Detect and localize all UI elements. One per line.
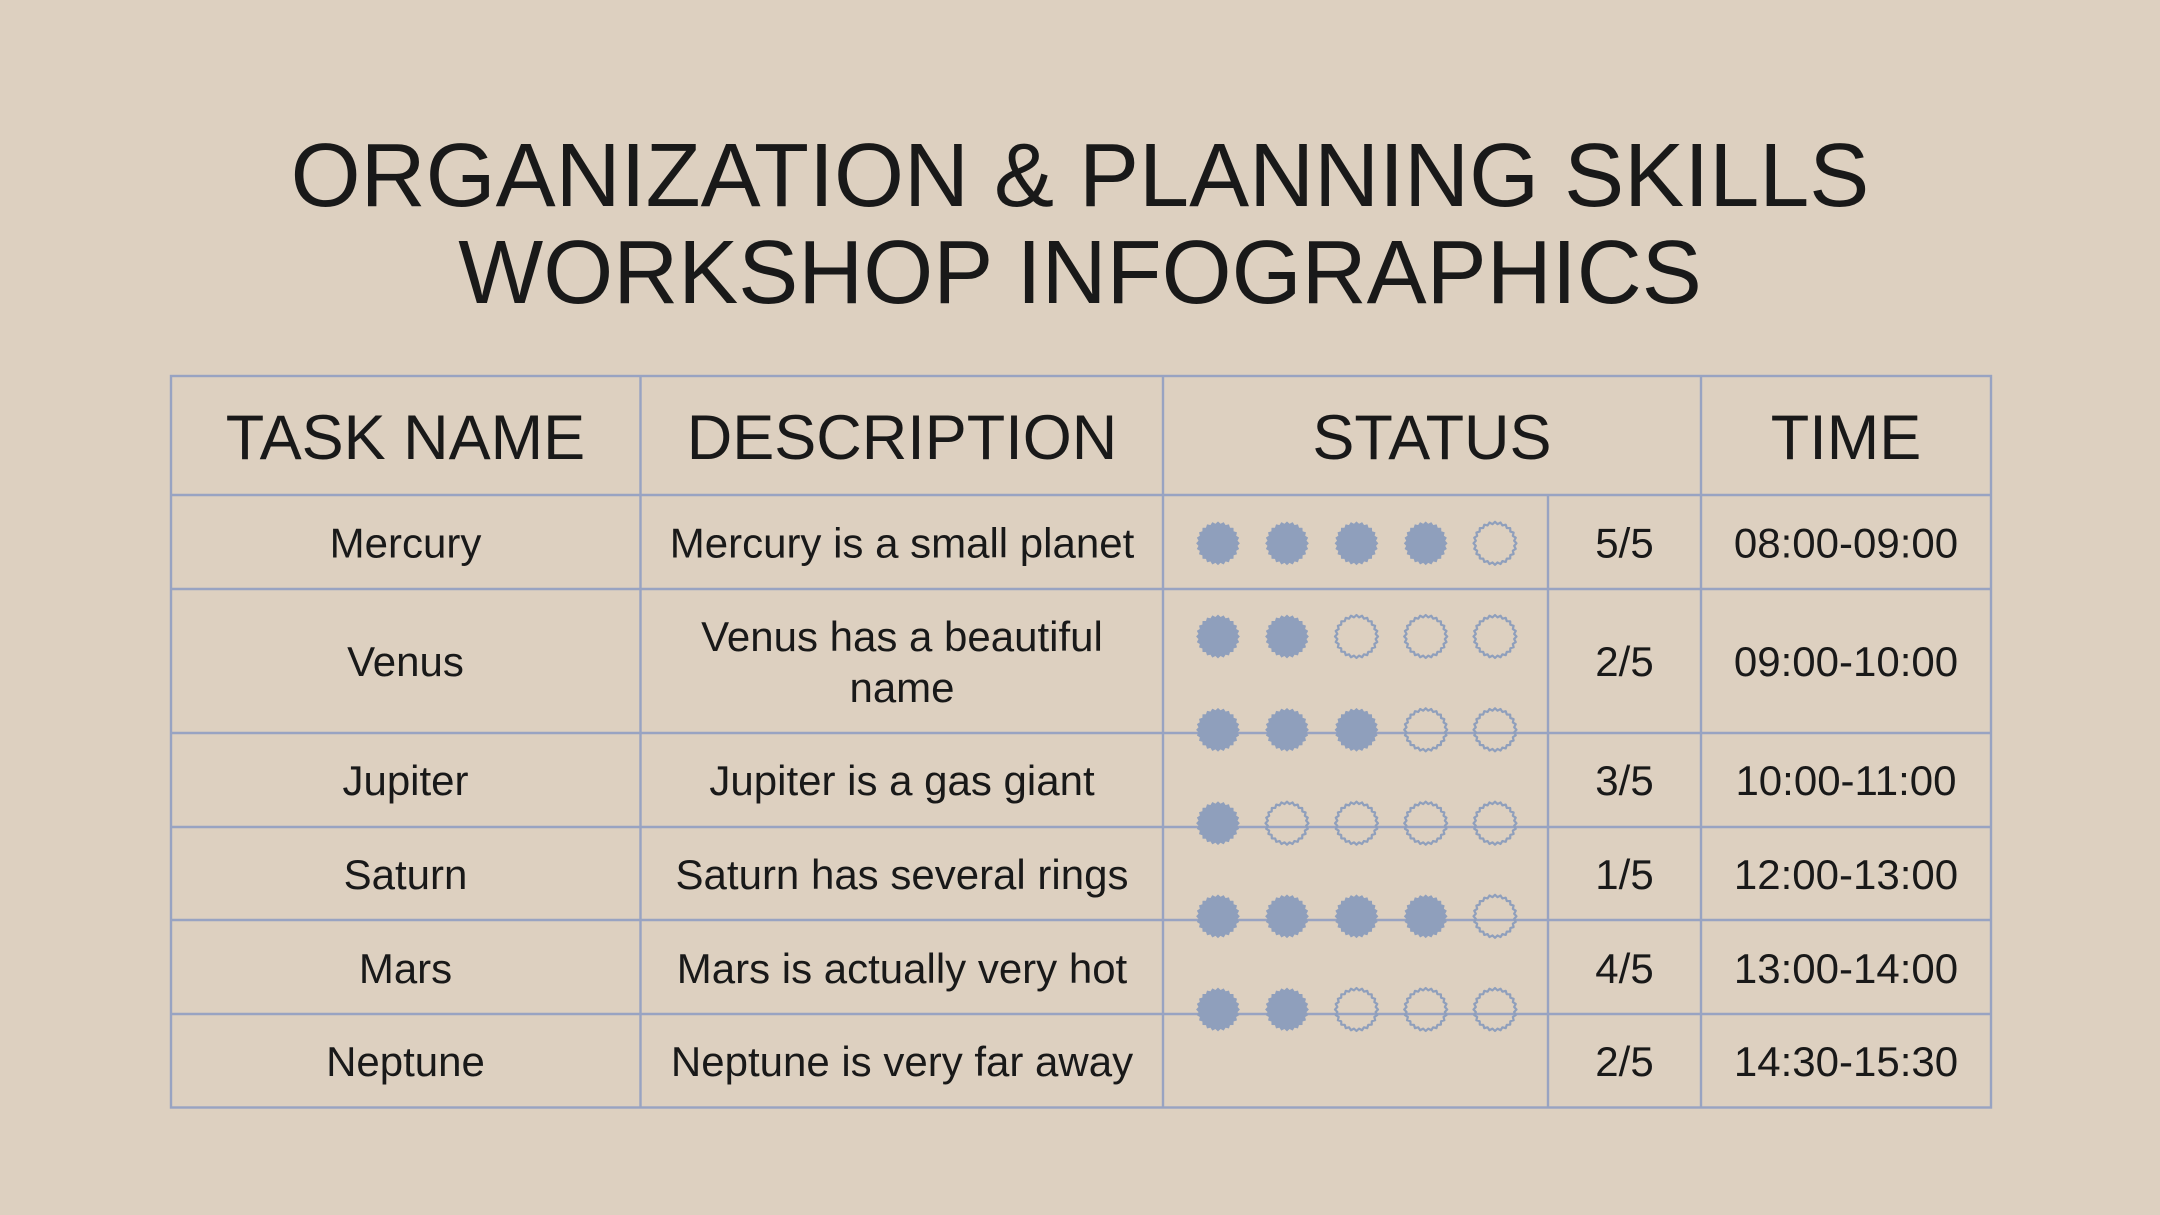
row: Mars: 4/5 [1595,945,1654,992]
row: Mars: 13:00-14:00 [1734,945,1958,992]
row: Mars [359,945,1958,992]
row: Saturn: Saturn has several rings [676,851,1128,898]
header: status: STATUS [1312,403,1552,473]
row: Mercury [330,520,1958,566]
row: Jupiter: 10:00-11:00 [1735,757,1957,804]
row: Jupiter [342,757,1957,804]
row: Neptune: 14:30-15:30 [1734,1038,1958,1085]
status rating dots: row 1 [1196,522,1516,565]
row: Mars: Mars is actually very hot [677,945,1128,992]
row: Jupiter: 3/5 [1595,757,1654,804]
header: description: DESCRIPTION [687,403,1117,473]
row: Mercury: 08:00-09:00 [1734,520,1958,566]
table grid [171,376,1991,1108]
table header row [226,403,1921,473]
row: Venus: name [849,664,955,711]
row: Venus: 09:00-10:00 [1734,638,1958,685]
row: Mars: Mars [359,945,452,992]
status rating dots: row 2 [1196,615,1516,658]
row: Venus [347,613,1958,711]
row: Neptune: 2/5 [1595,1038,1654,1085]
status rating dots: row 5 [1196,895,1516,938]
status rating dots: row 3 [1196,708,1516,751]
header: time: TIME [1771,403,1921,473]
row: Mercury: 5/5 [1595,520,1654,566]
row: Neptune: Neptune [326,1038,485,1085]
row: Saturn: 12:00-13:00 [1734,851,1958,898]
row: Mercury: Mercury is a small planet [670,520,1135,566]
title [291,126,1869,323]
row: Saturn: 1/5 [1595,851,1654,898]
row: Saturn: Saturn [344,851,467,898]
title: ORGANIZATION & PLANNING SKILLS [291,126,1869,226]
row: Mercury: Mercury [330,520,481,566]
title: WORKSHOP INFOGRAPHICS [458,223,1702,323]
header: task name: TASK NAME [226,403,585,473]
row: Neptune: Neptune is very far away [671,1038,1133,1085]
row: Venus: Venus has a beautiful [701,613,1103,660]
row: Venus: 2/5 [1595,638,1654,685]
row: Jupiter: Jupiter is a gas giant [709,757,1095,804]
status rating dots: row 6 [1196,988,1516,1031]
row: Neptune [326,1038,1958,1085]
row: Jupiter: Jupiter [342,757,469,804]
row: Saturn [344,851,1958,898]
status rating dots: row 4 [1196,802,1516,845]
row: Venus: Venus [347,638,464,685]
